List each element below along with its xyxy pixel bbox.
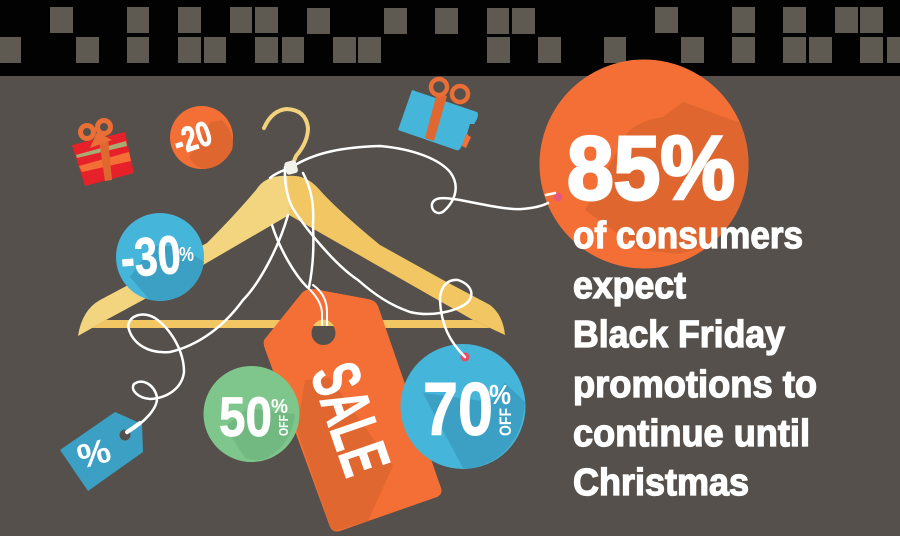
statistic 85%: 85%	[567, 119, 735, 219]
-30% badge: %	[179, 244, 194, 266]
-20 badge: -20	[168, 114, 217, 163]
70% off badge: OFF	[496, 408, 515, 436]
statistic description: of consumers	[573, 215, 803, 257]
strings	[127, 146, 555, 433]
70% off badge: 70	[423, 367, 493, 451]
statistic description: Black Friday	[573, 314, 785, 356]
-30% badge	[116, 213, 204, 301]
70% string pin	[460, 352, 470, 362]
statistic description: continue until	[573, 413, 810, 455]
50% off badge: %	[271, 396, 288, 418]
statistic description	[573, 215, 817, 504]
statistic description: Christmas	[573, 462, 749, 504]
string knot	[284, 160, 299, 175]
big circle string pin	[554, 192, 562, 202]
50% off badge: OFF	[276, 415, 291, 436]
film-strip header band	[0, 0, 900, 76]
big orange circle behind the statistic	[540, 60, 760, 268]
50% off badge	[204, 366, 300, 462]
% tag	[60, 412, 143, 491]
% tag: %	[73, 431, 115, 477]
-30% badge: -30	[119, 225, 183, 289]
SALE price tag	[264, 289, 442, 532]
hanger	[78, 109, 505, 336]
statistic description: promotions to	[573, 364, 817, 406]
blue gift icon	[398, 79, 478, 150]
red gift icon	[72, 120, 134, 186]
50% off badge: 50	[219, 385, 272, 448]
statistic description: expect	[573, 265, 686, 307]
70% off badge	[400, 344, 526, 469]
70% off badge: %	[489, 379, 511, 410]
